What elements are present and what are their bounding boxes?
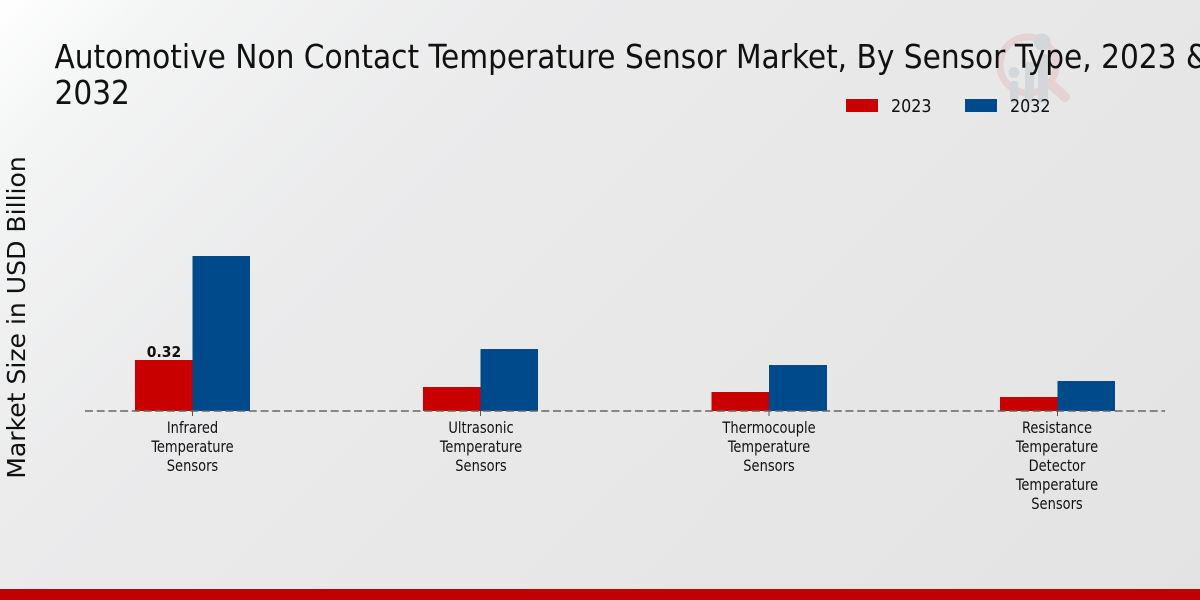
legend item: 2023: 2023 — [891, 97, 932, 117]
legend item: 2023 — [846, 97, 932, 117]
value label: 0.32 — [147, 343, 181, 361]
y axis title: Market Size in USD Billion — [2, 156, 31, 479]
legend item: 2032 — [965, 97, 1050, 117]
title: 2032 — [54, 73, 130, 112]
category label: Infrared: Temperature — [150, 437, 234, 456]
category label: Resistance: Sensors — [1031, 494, 1083, 513]
category label: Resistance — [1015, 418, 1098, 513]
x axis baseline — [85, 410, 1165, 412]
category label: Resistance: Resistance — [1022, 418, 1092, 437]
category label: Infrared: Sensors — [167, 456, 218, 475]
bars: Thermocouple Temperature Sensors — [712, 365, 827, 411]
category label: Ultrasonic: Temperature — [439, 437, 522, 456]
category label: Resistance: Detector — [1029, 456, 1086, 475]
bar chart — [85, 256, 1165, 513]
category label: Infrared: Infrared — [167, 418, 218, 437]
category label: Thermocouple: Thermocouple — [721, 418, 816, 437]
title: Automotive Non Contact Temperature Sensor Market, By Sensor Type, 2023 & — [54, 37, 1200, 76]
legend item: 2032: 2032 — [1010, 97, 1050, 117]
category label: Resistance: Temperature — [1015, 437, 1098, 456]
category label: Thermocouple: Sensors — [743, 456, 795, 475]
x axis ticks — [192, 411, 1058, 416]
category label: Thermocouple: Temperature — [727, 437, 810, 456]
footer bar — [0, 589, 1200, 600]
category label: Infrared — [150, 418, 234, 475]
category label: Ultrasonic — [439, 418, 522, 475]
title — [54, 37, 1200, 112]
bars: Resistance Temperature Detector Temperature Sensors — [1000, 381, 1115, 411]
bars: Ultrasonic Temperature Sensors — [423, 349, 538, 411]
category label: Ultrasonic: Ultrasonic — [448, 418, 514, 437]
legend — [846, 97, 1050, 117]
icon: watermark magnifier logo — [1000, 34, 1065, 103]
category label: Ultrasonic: Sensors — [455, 456, 507, 475]
category label: Thermocouple — [721, 418, 816, 475]
category label: Resistance: Temperature — [1015, 475, 1098, 494]
bars: Infrared Temperature Sensors — [135, 256, 250, 411]
